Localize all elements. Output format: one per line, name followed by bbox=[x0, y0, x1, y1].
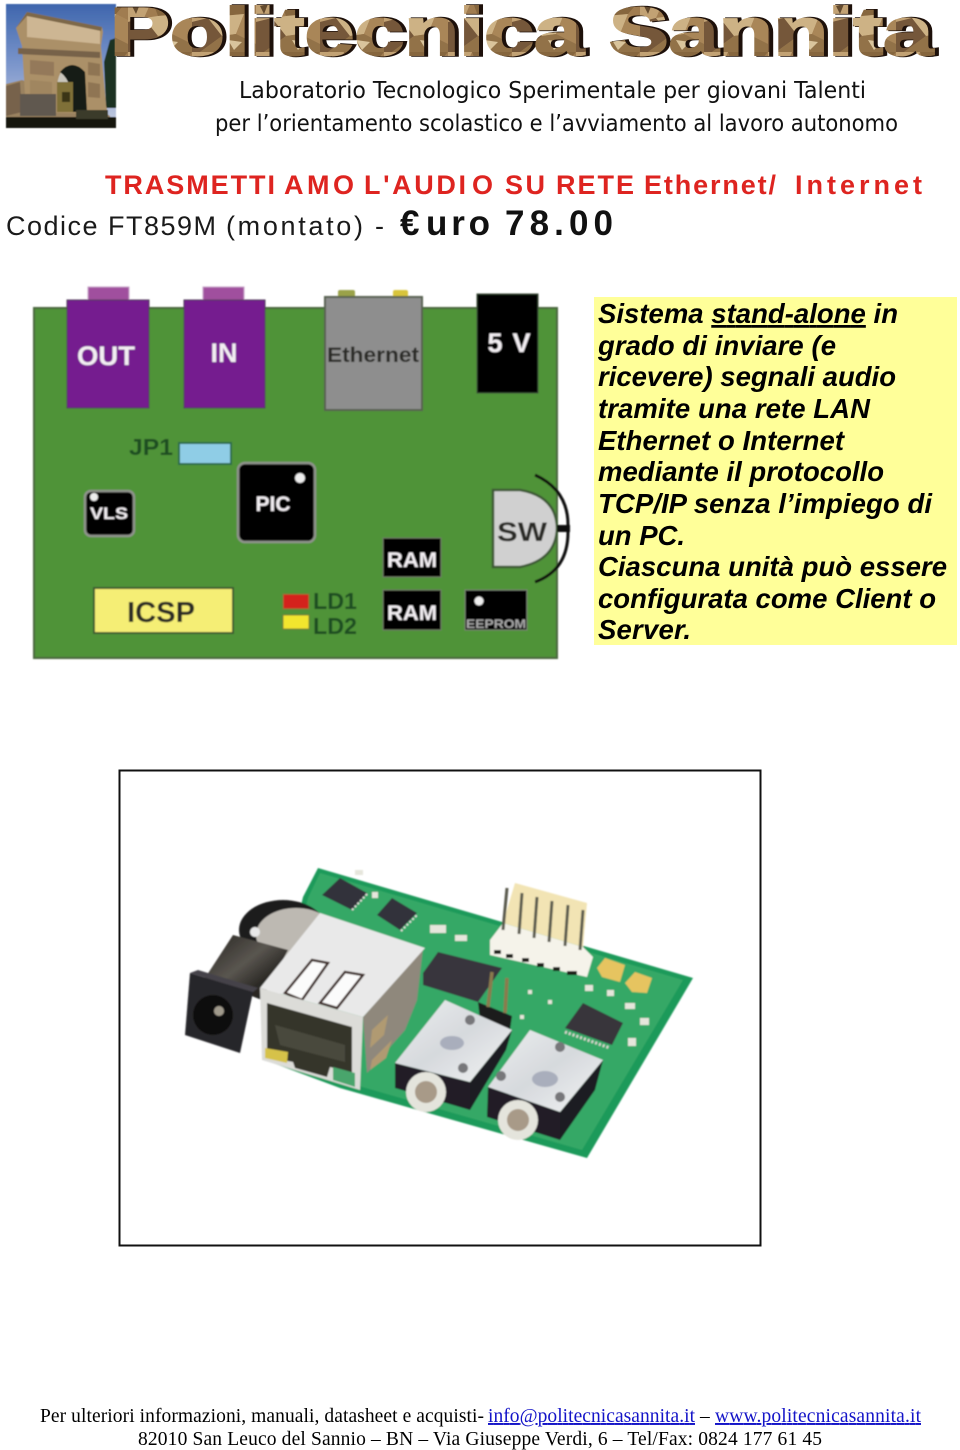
switch: SW bbox=[493, 475, 570, 582]
LEDs: LD1 and LD2: LD1 bbox=[313, 588, 357, 614]
photo frame bbox=[120, 770, 760, 1246]
description panel: configurata come Client o bbox=[598, 583, 936, 614]
product title: Ethernet/ bbox=[644, 170, 776, 200]
connector: OUT: OUT bbox=[77, 341, 136, 371]
description panel: Ethernet o Internet bbox=[598, 425, 846, 456]
tagline: per l’orientamento scolastico e l’avviamento al lavoro autonomo bbox=[215, 111, 898, 137]
product title: AMO bbox=[284, 170, 354, 200]
board base bbox=[34, 308, 557, 658]
chip: PIC bbox=[238, 463, 315, 542]
chip: RAM 2 bbox=[383, 590, 441, 630]
product title: Internet bbox=[795, 170, 922, 200]
tagline bbox=[215, 78, 898, 137]
product code and price: 78.00 bbox=[505, 204, 613, 243]
tree beside the arch bbox=[104, 38, 116, 108]
description panel: un PC. bbox=[598, 520, 685, 551]
small chips bbox=[322, 878, 367, 910]
chip: VLS: VLS bbox=[90, 504, 128, 523]
pin header bbox=[490, 883, 593, 977]
footer contacts: info@politecnicasannita.it bbox=[488, 1406, 696, 1427]
chip: RAM 1 bbox=[383, 538, 441, 577]
connector: Ethernet: Ethernet bbox=[327, 344, 419, 367]
jumper: JP1 bbox=[129, 434, 231, 464]
description panel: ricevere) segnali audio bbox=[598, 361, 896, 392]
switch: SW: SW bbox=[497, 517, 548, 547]
footer contacts bbox=[40, 1406, 922, 1450]
product code and price: - bbox=[375, 211, 384, 241]
connector: Ethernet bbox=[325, 290, 422, 410]
chip: EEPROM: EEPROM bbox=[466, 617, 526, 631]
product code and price: (montato) bbox=[226, 211, 363, 241]
chip: EEPROM bbox=[465, 590, 527, 631]
description panel: grado di inviare (e bbox=[597, 330, 836, 361]
description panel: mediante il protocollo bbox=[598, 456, 884, 487]
connector: 5 V: 5 V bbox=[488, 328, 530, 358]
chip: VLS bbox=[85, 491, 134, 536]
footer contacts: 82010 San Leuco del Sannio – BN – Via Giuseppe Verdi, 6 – Tel/Fax: 0824 177 61 45 bbox=[138, 1429, 822, 1450]
footer contacts: www.politecnicasannita.it bbox=[715, 1406, 922, 1427]
description panel: TCP/IP senza l’impiego di bbox=[598, 488, 933, 519]
photo: triumphal arch bbox=[6, 4, 116, 128]
product title: SU bbox=[505, 170, 545, 200]
connector: IN bbox=[184, 287, 265, 408]
product title: O bbox=[472, 170, 493, 200]
PCB bbox=[265, 868, 693, 1158]
chip: RAM 1: RAM bbox=[387, 549, 437, 572]
connector: 5 V bbox=[477, 294, 538, 393]
product title: RETE bbox=[556, 170, 634, 200]
yellow capacitors bbox=[597, 958, 625, 982]
audio jack 1 bbox=[395, 1000, 512, 1112]
tagline: Laboratorio Tecnologico Sperimentale per giovani Talenti bbox=[239, 78, 866, 104]
LEDs: LD1 and LD2 bbox=[283, 588, 357, 639]
connector: OUT bbox=[67, 287, 149, 408]
photo: assembled circuit board bbox=[185, 868, 693, 1158]
product code and price: Codice FT859M bbox=[6, 211, 216, 241]
footer contacts: – bbox=[699, 1406, 710, 1427]
footer contacts: Per ulteriori informazioni, manuali, datasheet e acquisti- bbox=[40, 1406, 484, 1427]
Ethernet socket bbox=[260, 913, 425, 1090]
product title bbox=[105, 170, 922, 200]
product title: TRASMETTI bbox=[105, 170, 275, 200]
audio jack 2 bbox=[487, 1030, 603, 1140]
description panel: tramite una rete LAN bbox=[598, 393, 871, 424]
power jack bbox=[185, 935, 288, 1053]
board layout diagram bbox=[34, 287, 570, 658]
description panel: Ciascuna unità può essere bbox=[598, 551, 947, 582]
LEDs: LD1 and LD2: LD2 bbox=[313, 613, 357, 639]
product code and price bbox=[6, 204, 613, 243]
product code and price: € bbox=[400, 204, 419, 243]
battery holder bbox=[239, 900, 336, 962]
description panel: Sistema stand-alone in bbox=[598, 298, 898, 329]
chip: RAM 2: RAM bbox=[387, 602, 437, 625]
product title: L'AUDI bbox=[364, 170, 466, 200]
jumper pins bbox=[478, 972, 512, 1030]
main chips bbox=[423, 952, 502, 1002]
description panel bbox=[594, 297, 957, 645]
product code and price: uro bbox=[426, 204, 490, 243]
chip: PIC: PIC bbox=[255, 493, 291, 516]
connector: ICSP: ICSP bbox=[127, 597, 195, 629]
connector: IN: IN bbox=[210, 338, 238, 368]
connector: ICSP bbox=[94, 588, 233, 633]
jumper: JP1: JP1 bbox=[129, 434, 173, 460]
description panel: Server. bbox=[598, 614, 691, 645]
